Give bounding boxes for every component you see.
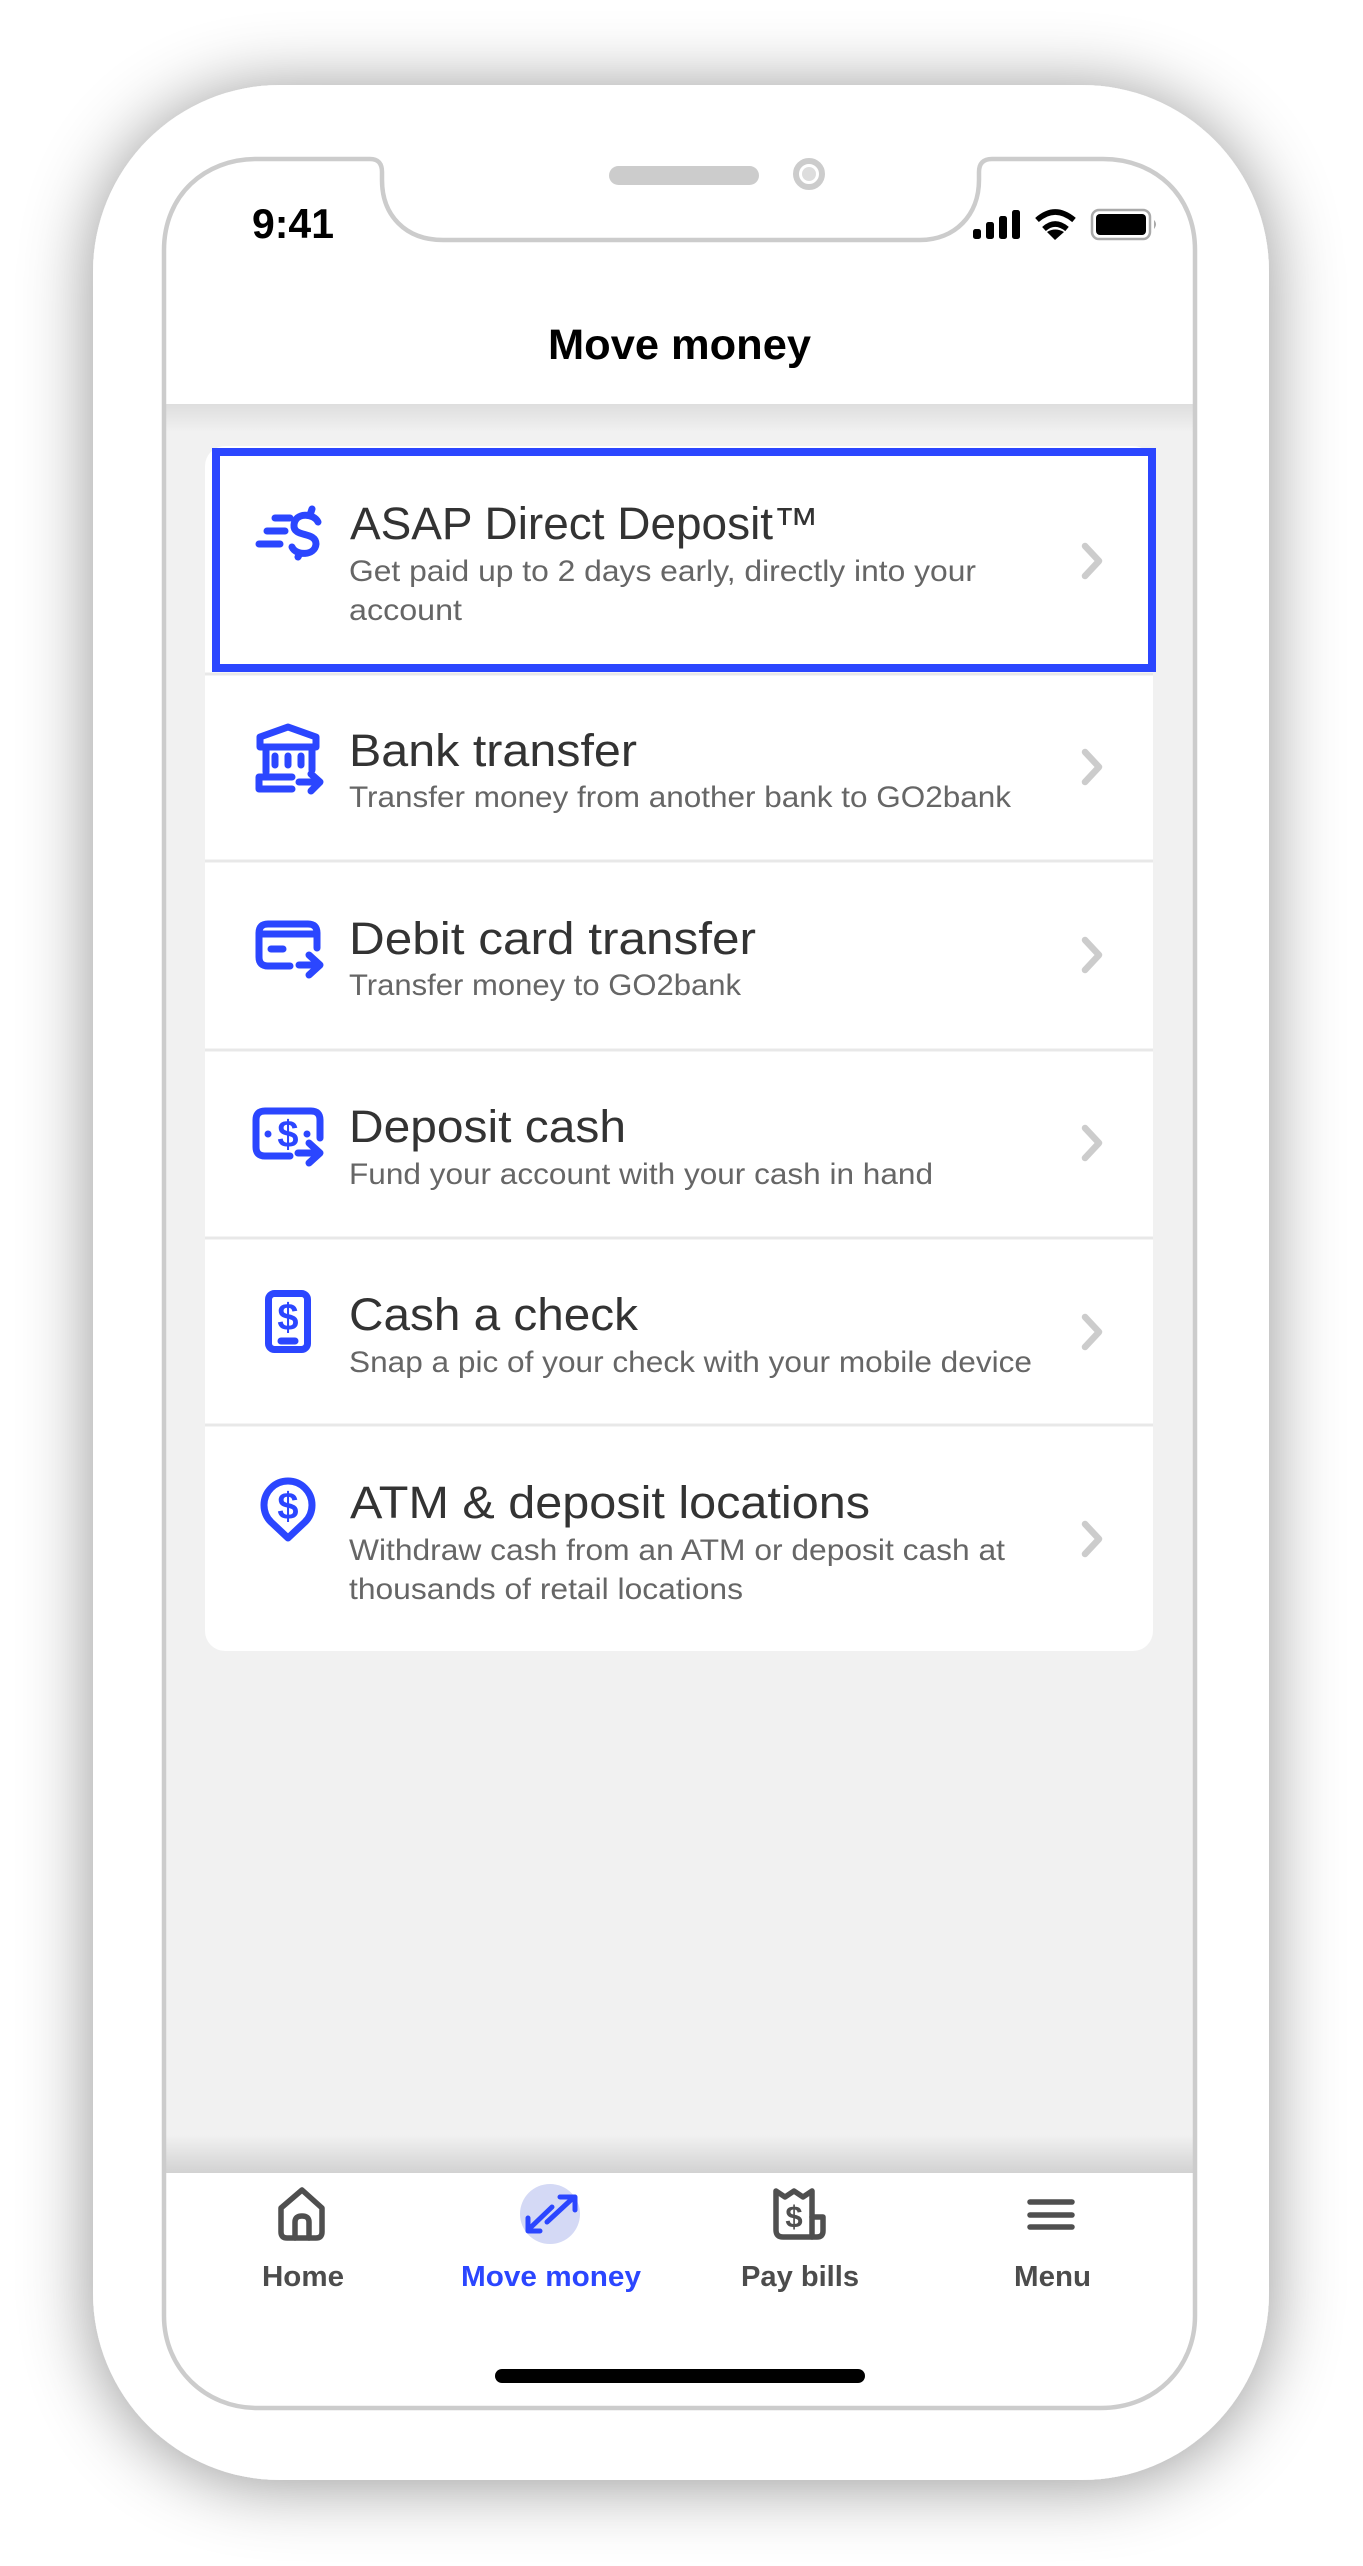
camera (796, 161, 822, 187)
icon: signal bars (973, 210, 1020, 239)
phone screen (166, 404, 1193, 2173)
screen outline with notch (164, 159, 1195, 2408)
icon: bank (259, 727, 320, 791)
speaker (609, 166, 759, 185)
icon: menu (1030, 2202, 1072, 2227)
title: Move money (548, 321, 811, 369)
heading: Debit card transfer (349, 913, 756, 964)
row: ATM and deposit locations: thousands of retail locations (349, 1573, 743, 1606)
icon: deposit cash (256, 1111, 320, 1163)
icon: debit card (259, 924, 320, 975)
heading: Cash a check (349, 1289, 639, 1340)
chevron (1085, 546, 1099, 576)
row: Cash a check (268, 1289, 1099, 1379)
description: Get paid up to 2 days early, directly into your (349, 555, 976, 588)
icon: deposit cash: $ (277, 1114, 299, 1156)
description: Fund your account with your cash in hand (349, 1158, 933, 1191)
icon: home (281, 2190, 322, 2238)
chevron (1085, 940, 1099, 970)
row: Debit card transfer (259, 913, 1099, 1002)
row: Bank transfer (259, 725, 1099, 814)
icon: receipt: $ (785, 2199, 803, 2234)
nav item: Menu: Menu (1014, 2261, 1091, 2293)
panel: options card (205, 446, 1153, 1651)
icon: check on phone (268, 1294, 308, 1350)
row: ASAP Direct Deposit (259, 498, 1099, 627)
chevron (1085, 752, 1099, 782)
heading: ASAP Direct Deposit™ (350, 498, 819, 549)
description: Withdraw cash from an ATM or deposit cash at (349, 1534, 1006, 1567)
nav item: Pay bills (741, 2191, 859, 2293)
chevron (1085, 1524, 1099, 1554)
icon: move money arrows (520, 2184, 580, 2244)
status bar time: 9:41 (252, 200, 334, 247)
heading: Bank transfer (349, 725, 637, 776)
nav item: Pay bills: Pay bills (741, 2261, 859, 2293)
home indicator (495, 2369, 865, 2383)
nav item: Move money: Move money (461, 2261, 641, 2293)
chevron (1085, 1128, 1099, 1158)
icon: location pin (264, 1481, 312, 1538)
nav item: Home (262, 2190, 344, 2293)
icon: ASAP dollar (259, 509, 318, 557)
description: Transfer money to GO2bank (349, 969, 742, 1002)
icon: wifi (1037, 212, 1074, 240)
nav item: Home: Home (262, 2261, 344, 2293)
chevron (1085, 1317, 1099, 1347)
icon: battery (1092, 210, 1156, 239)
icon: location pin: $ (277, 1486, 299, 1528)
row: ATM and deposit locations (264, 1477, 1099, 1606)
icon: check on phone: $ (277, 1297, 299, 1339)
description: Transfer money from another bank to GO2bank (349, 781, 1012, 814)
nav item: Menu (1014, 2202, 1091, 2293)
heading: ATM & deposit locations (350, 1477, 870, 1528)
description: Snap a pic of your check with your mobile device (349, 1346, 1032, 1379)
row highlight (216, 452, 1152, 668)
row: ASAP Direct Deposit: account (349, 594, 463, 627)
nav item: Move money (461, 2184, 641, 2293)
row: Deposit cash (256, 1101, 1099, 1191)
heading: Deposit cash (349, 1101, 626, 1152)
panel: bottom navigation (262, 2184, 1091, 2293)
